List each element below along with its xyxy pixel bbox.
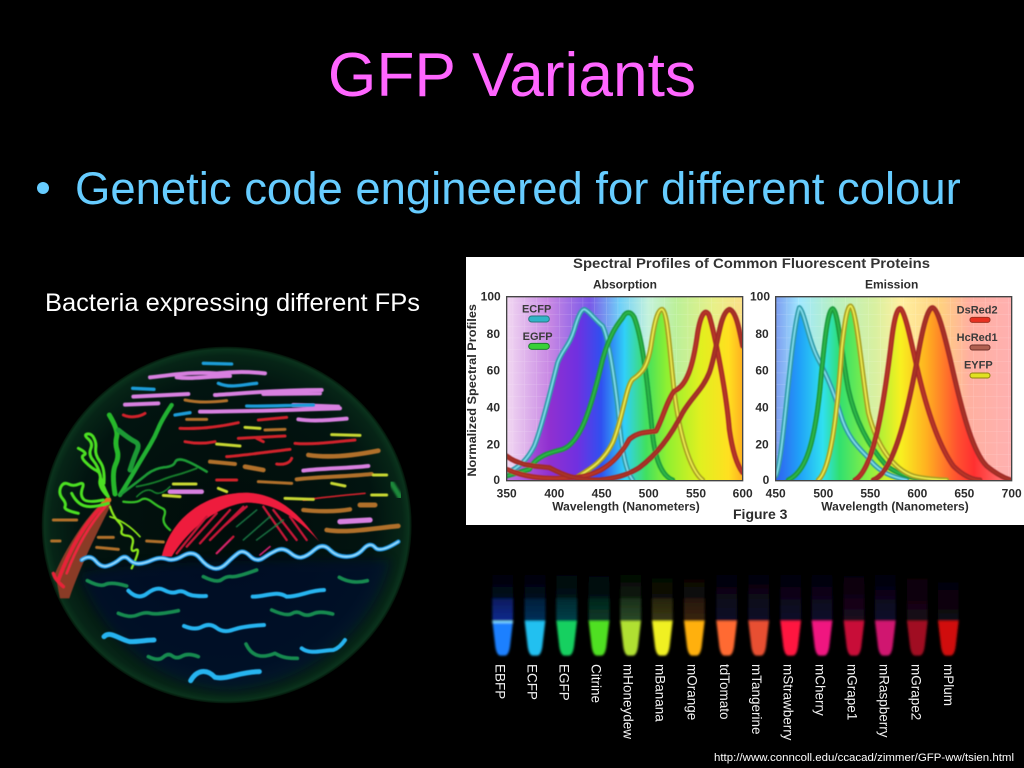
chart: absorption: 450 xyxy=(592,486,612,500)
tube labels: ECFP xyxy=(525,664,540,700)
tube labels: mBanana xyxy=(653,664,668,722)
chart: absorption: 40 xyxy=(487,400,500,414)
figure title: Spectral Profiles of Common Fluorescent Proteins xyxy=(573,256,930,271)
tube labels: mStrawberry xyxy=(780,664,795,741)
palm leaves xyxy=(60,405,207,568)
chart: absorption: 400 xyxy=(544,486,565,500)
axes xyxy=(507,296,743,481)
caption: bacteria: Bacteria expressing different FPs xyxy=(45,289,420,317)
chart: absorption: 350 xyxy=(497,486,517,500)
legend: DsRed2, HcRed1, EYFP: EYFP xyxy=(964,360,993,372)
chart: absorption: Normalized Spectral Profiles xyxy=(465,304,479,477)
chart: absorption: 0 xyxy=(493,473,500,487)
tube labels: mRaspberry xyxy=(876,664,891,738)
chart: absorption: 80 xyxy=(487,327,500,341)
palm trunk xyxy=(53,499,111,598)
photo: row of fluorescent protein tubes xyxy=(487,573,963,741)
sky streaks: pink xyxy=(125,372,370,522)
chart: emission: 80 xyxy=(755,327,769,341)
waves: horizon xyxy=(82,542,398,569)
chart: emission: 650 xyxy=(954,486,975,500)
chart: absorption: Absorption xyxy=(593,278,657,292)
tube labels: EBFP xyxy=(493,664,508,699)
legend: ECFP, EGFP: EGFP xyxy=(523,331,553,343)
chart: emission xyxy=(750,278,1022,514)
chart: absorption: Wavelength (Nanometers) xyxy=(552,500,700,514)
chart: emission: 700 xyxy=(1002,486,1022,500)
chart: absorption: 500 xyxy=(639,486,659,500)
legend: DsRed2, HcRed1, EYFP xyxy=(957,304,998,378)
sky streaks: red xyxy=(123,413,365,500)
legend: ECFP, EGFP: ECFP xyxy=(522,304,551,316)
chart: absorption: 100 xyxy=(481,290,501,304)
chart: absorption xyxy=(465,278,753,514)
legend: ECFP, EGFP xyxy=(522,304,553,349)
tube labels xyxy=(493,664,956,741)
sky streaks: blue xyxy=(133,363,313,415)
waves: green xyxy=(87,570,367,659)
tube labels: mGrape2 xyxy=(909,664,924,720)
tube labels: mOrange xyxy=(684,664,699,720)
chart: emission: 100 xyxy=(750,290,770,304)
tube labels: mGrape1 xyxy=(844,664,859,720)
tube labels: tdTomato xyxy=(717,664,732,719)
bullet text: Genetic code engineered for different colour xyxy=(75,163,961,214)
legend: DsRed2, HcRed1, EYFP: HcRed1 xyxy=(957,332,998,344)
sun xyxy=(162,493,319,557)
chart: emission: 500 xyxy=(813,486,834,500)
sea tint xyxy=(80,560,390,690)
legend: DsRed2, HcRed1, EYFP: DsRed2 xyxy=(957,304,998,316)
chart: emission: 20 xyxy=(755,438,769,452)
sky streaks: yellow xyxy=(163,427,387,499)
figure label: Figure 3 xyxy=(733,506,788,522)
chart: emission: 40 xyxy=(755,400,769,414)
tube labels: Citrine xyxy=(588,664,603,703)
chart: emission: 450 xyxy=(766,486,786,500)
axes xyxy=(776,296,1012,481)
photo: petri dish with bacteria painting xyxy=(42,347,412,703)
panel background xyxy=(466,257,1024,525)
chart: absorption: 550 xyxy=(686,486,706,500)
chart: emission: 0 xyxy=(763,473,770,487)
waves: cyan xyxy=(104,589,345,681)
tube labels: mCherry xyxy=(812,664,827,716)
tube labels: EGFP xyxy=(556,664,571,701)
chart: emission: 600 xyxy=(907,486,928,500)
chart: absorption: 20 xyxy=(487,438,500,452)
sky streaks: orange xyxy=(52,400,398,549)
green glow at rim xyxy=(392,483,400,497)
panel: spectral profiles figure xyxy=(465,256,1024,525)
chart: emission: Wavelength (Nanometers) xyxy=(821,500,969,514)
tube labels: mHoneydew xyxy=(620,664,635,739)
tube labels: mPlum xyxy=(941,664,956,706)
chart: emission: 550 xyxy=(860,486,881,500)
source url: http://www.conncoll.edu/ccacad/zimmer/GFP-ww/tsien.html xyxy=(714,752,1014,764)
chart: emission: 60 xyxy=(755,364,769,378)
title: GFP Variants xyxy=(328,41,696,110)
chart: emission: Emission xyxy=(865,278,918,292)
tube labels: mTangerine xyxy=(749,664,764,734)
chart: absorption: 60 xyxy=(487,364,500,378)
chart: absorption: 600 xyxy=(733,486,753,500)
